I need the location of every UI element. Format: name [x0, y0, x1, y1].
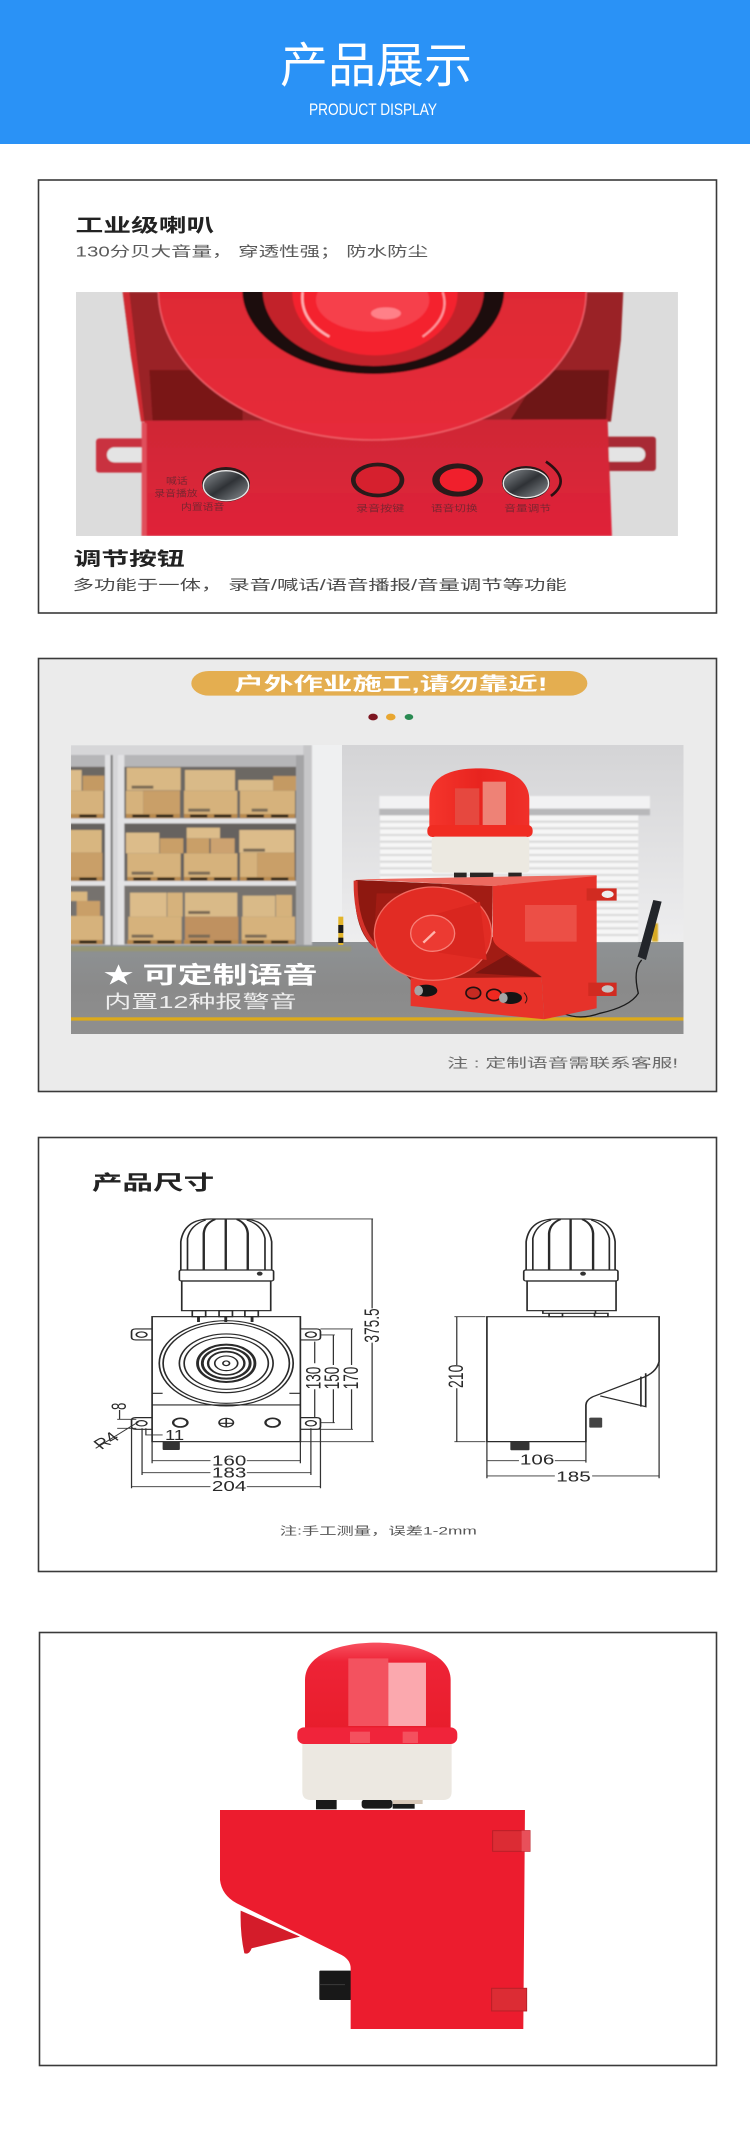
horn	[374, 887, 492, 980]
red enclosure	[220, 1810, 525, 2029]
voice switch button	[432, 463, 483, 497]
three dots	[368, 714, 413, 720]
dimension labels	[89, 1308, 591, 1494]
photo: warehouse scene	[70, 745, 690, 1035]
text: volume description: 130分贝大音量， 穿透性强； 防水防尘	[76, 244, 428, 260]
lamp base	[302, 1744, 452, 1800]
front view drawing	[132, 1219, 320, 1442]
subtitle: PRODUCT DISPLAY	[309, 100, 437, 119]
button labels: 语音切换	[431, 503, 478, 514]
lamp band	[297, 1727, 457, 1744]
note: 注 : 定制语音需联系客服!	[447, 1056, 678, 1071]
side view knobs	[510, 1272, 602, 1450]
feet under lamp	[316, 1799, 423, 1809]
panel: custom voice	[38, 658, 716, 1092]
horn mouth	[241, 1911, 300, 1954]
panel: product dimensions	[38, 1138, 716, 1572]
cable gland front	[163, 1272, 263, 1450]
heading: industrial horn: 工业级喇叭	[76, 215, 214, 236]
dimension labels: 8	[107, 1403, 130, 1410]
hinge bottom	[492, 1988, 527, 2011]
warehouse shelves	[70, 745, 690, 1021]
title: 产品展示	[280, 40, 472, 93]
dimension labels: 150	[321, 1367, 344, 1389]
header banner	[0, 0, 750, 144]
roller shutter	[379, 796, 658, 942]
caption: custom voice: 可定制语音	[143, 963, 318, 989]
control knob left	[202, 467, 250, 502]
control knobs	[414, 985, 527, 1004]
volume knob	[502, 462, 561, 499]
text: functions description: 多功能于一体， 录音/喊话/语音播报/音量调节等功能	[73, 577, 567, 593]
bollard	[338, 917, 343, 945]
side view drawing	[487, 1219, 659, 1442]
dimension labels: 106	[520, 1452, 554, 1468]
icon: star: ★	[103, 963, 134, 988]
panel: product side photo	[40, 1632, 716, 2066]
button labels: 喊话	[166, 475, 188, 486]
caption: twelve alarm tones: 内置12种报警音	[104, 992, 297, 1012]
hinge top	[493, 1831, 530, 1851]
lamp dome	[429, 768, 529, 828]
button labels	[154, 475, 551, 514]
dimension labels: 170	[339, 1367, 362, 1389]
button labels: 录音播放	[154, 488, 198, 499]
floor stripe	[70, 1017, 690, 1021]
red siren with horn	[355, 768, 662, 1019]
lamp base	[432, 837, 529, 873]
dimension lines	[96, 1219, 659, 1488]
heading: dimensions: 产品尺寸	[92, 1172, 214, 1194]
lamp feet	[454, 873, 522, 877]
dimension labels: 130	[302, 1367, 325, 1389]
record button	[351, 463, 404, 497]
heading: adjustment buttons: 调节按钮	[74, 549, 185, 570]
button labels: 内置语音	[181, 501, 224, 512]
note: 注:手工测量，误差1-2mm	[280, 1525, 477, 1537]
button labels: 录音按键	[356, 503, 404, 514]
warning lamp dome	[305, 1643, 451, 1729]
panel: speaker and buttons	[38, 140, 716, 613]
button labels: 音量调节	[504, 503, 551, 514]
pill banner: 户外作业施工,请勿靠近!	[234, 674, 548, 695]
dimension labels: 160	[212, 1453, 246, 1469]
dimension labels: 210	[444, 1365, 468, 1388]
dimension labels: 375.5	[360, 1308, 383, 1343]
enclosure	[355, 875, 597, 1019]
lamp facets	[455, 782, 506, 825]
dimension labels: R4	[89, 1429, 123, 1452]
dimension labels: 11	[165, 1427, 184, 1443]
dimension labels: 183	[212, 1465, 246, 1481]
dimension labels: 204	[212, 1478, 246, 1494]
pill banner	[191, 671, 587, 696]
knob	[319, 1971, 351, 2000]
microphone and cable	[563, 900, 662, 1017]
mounting lugs	[587, 888, 617, 996]
lamp band	[427, 825, 533, 837]
photo: horn close-up	[76, 292, 678, 536]
dimension labels: 185	[556, 1468, 591, 1485]
